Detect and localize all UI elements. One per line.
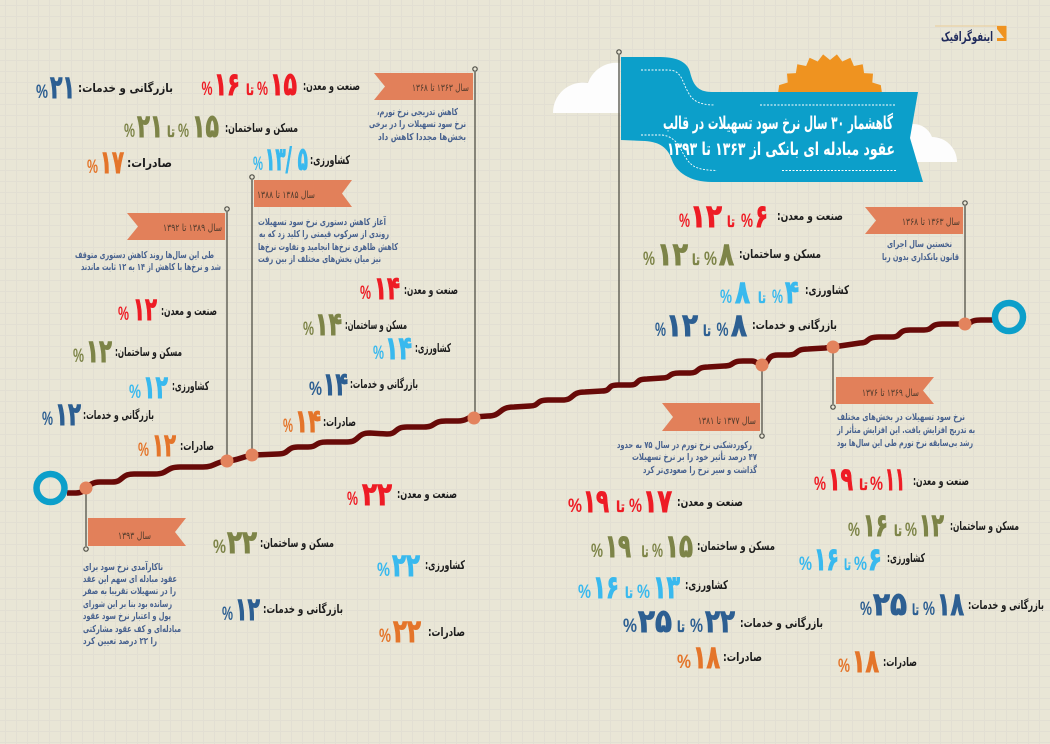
title pole: [617, 50, 621, 384]
note: 1389-1392: [75, 250, 221, 273]
stat: 1393 trade: ۱۲: [235, 590, 260, 628]
stat: 1369-76 agriculture: ۱۶: [814, 540, 839, 578]
stat: 1393 agriculture: کشاورزی:: [425, 558, 465, 573]
stat: 1363-68 exports: %: [87, 157, 98, 178]
stat: 1369-76 exports: ۱۸: [852, 642, 879, 680]
stat: 1363-68 right trade: %: [716, 320, 729, 341]
stat: 1363-68 right trade: بازرگانی و خدمات:: [752, 318, 837, 333]
stat: 1363-68 right trade: %: [655, 320, 666, 341]
stat: 1363-68 right agriculture: ۸: [735, 273, 750, 311]
stat: 1385-88 exports: ۱۴: [295, 402, 321, 440]
flag: 1363-1368 right: سال ۱۳۶۳ تا ۱۳۶۸: [902, 217, 960, 228]
stat: 1393 industry: صنعت و معدن:: [397, 487, 457, 502]
note: 1393: عقود مبادله ای سهم این عقد: [83, 574, 177, 585]
stat: 1369-76 agriculture: کشاورزی:: [887, 551, 925, 566]
stat: 1385-88 trade: بازرگانی و خدمات:: [350, 377, 418, 392]
logo: infographic: اینفوگرافیک: [941, 29, 993, 45]
stat: 1369-76 trade: %: [860, 599, 872, 620]
note: 1385-1388: کاهش ظاهری نرخ‌ها انجامید و تفاوت نرخ‌ها: [258, 242, 398, 253]
stat: 1369-76 industry: [814, 460, 969, 498]
stat: 1389-92 agriculture: ۱۲: [143, 368, 168, 406]
flag: 1385-1388: [254, 180, 352, 207]
stat: 1363-68 right trade: ۱۲: [666, 306, 698, 344]
stat: 1369-76 exports: %: [838, 656, 850, 677]
stat: 1363-68 agriculture: %: [253, 154, 263, 175]
title text: [663, 112, 895, 160]
note: 1393: را ۲۲ درصد تعیین کرد: [83, 636, 157, 647]
flag: 1363-1368 left: [374, 73, 473, 100]
note: 1369-1376: نرخ سود تسهیلات در بخش‌های مختلف: [837, 412, 965, 423]
stat: 1385-88 agriculture: %: [373, 343, 384, 364]
stat: 1363-68 housing: %: [124, 121, 135, 142]
stat: 1369-76 industry: %: [870, 474, 883, 495]
timeline start ring: [36, 474, 64, 502]
stat: 1363-68 right trade: تا: [703, 322, 711, 340]
stat: 1377-81 industry: صنعت و معدن:: [677, 495, 743, 510]
stat: 1389-92 industry: %: [118, 304, 129, 325]
note: 1377-1381: ۴۷ درصد تأثیر خود را بر نرخ تسهیلات: [632, 450, 757, 463]
stat: 1377-81 agriculture: تا: [625, 584, 633, 602]
stat: 1393 agriculture: [377, 546, 465, 584]
stat: 1389-92 exports: %: [138, 440, 149, 461]
stat: 1389-92 housing: [73, 332, 182, 370]
stat: 1363-68 trade: %: [36, 82, 48, 103]
stat: 1389-92 industry: صنعت و معدن:: [161, 304, 217, 319]
sun: [777, 54, 883, 100]
timeline dots: [80, 318, 972, 494]
stat: 1385-88 agriculture: ۱۴: [385, 329, 412, 367]
stat: 1377-81 agriculture: %: [578, 582, 591, 603]
note: 1385-1388: روندی از سرکوب قیمتی را کلید زد که به: [259, 229, 389, 240]
stat: 1385-88 housing: %: [303, 319, 314, 340]
note: 1363-1368 left: کاهش تدریجی نرخ تورم،: [377, 107, 458, 118]
stat: 1363-68 housing: مسکن و ساختمان:: [225, 121, 298, 136]
stat: 1393 housing: %: [213, 537, 226, 558]
stat: 1385-88 trade: %: [309, 379, 322, 400]
stat: 1377-81 industry: %: [568, 496, 582, 517]
stat: 1377-81 agriculture: ۱۶: [593, 568, 619, 606]
stat: 1393 housing: [213, 523, 334, 561]
stat: 1377-81 agriculture: کشاورزی:: [685, 578, 728, 593]
stat: 1385-88 housing: ۱۴: [315, 305, 342, 343]
stat: 1363-68 right industry: ۱۲: [690, 197, 722, 235]
stat: 1363-68 right industry: %: [741, 211, 753, 232]
stat: 1385-88 trade: [309, 365, 418, 403]
stat: 1369-76 trade: تا: [912, 601, 919, 619]
stat: 1363-68 exports: صادرات:: [127, 156, 172, 170]
stat: 1377-81 exports: صادرات:: [723, 650, 762, 664]
stat: 1389-92 agriculture: کشاورزی:: [172, 379, 209, 394]
stat: 1363-68 right agriculture: تا: [758, 289, 766, 307]
stat: 1363-68 trade: بازرگانی و خدمات:: [78, 81, 173, 96]
stat: 1385-88 industry: ۱۴: [374, 269, 400, 307]
stat: 1377-81 exports: [677, 638, 762, 676]
stat: 1377-81 agriculture: ۱۳: [653, 568, 680, 606]
stat: 1385-88 trade: ۱۴: [323, 365, 348, 403]
stat: 1393 exports: %: [379, 626, 391, 647]
stat: 1363-68 industry: ۱۵: [270, 65, 297, 103]
stat: 1385-88 industry: %: [360, 283, 371, 304]
stat: 1369-76 agriculture: %: [854, 554, 867, 575]
note: 1393: را در تسهیلات تقریبا به صفر: [82, 586, 176, 597]
stat: 1369-76 exports: [838, 642, 917, 680]
stat: 1363-68 industry: صنعت و معدن:: [303, 79, 360, 94]
note: 1377-1381: گذاشت و سیر نرخ را صعودی‌تر کرد: [643, 464, 757, 476]
note: 1363-1368 left: نرخ سود تسهیلات را در برخی: [369, 119, 466, 130]
note: 1369-1376: [836, 412, 975, 449]
stat: 1389-92 exports: ۱۲: [152, 426, 176, 464]
stat: 1393 industry: %: [347, 489, 358, 510]
note: 1385-1388: [258, 215, 398, 265]
timeline end ring: [995, 303, 1023, 331]
cloud: left: [553, 63, 620, 113]
stat: 1385-88 exports: [283, 402, 356, 440]
stat: 1363-68 agriculture: کشاورزی:: [310, 153, 350, 168]
stat: 1393 agriculture: %: [377, 560, 390, 581]
stat: 1369-76 industry: تا: [859, 476, 868, 494]
stat: 1369-76 trade: [860, 585, 1044, 623]
stat: 1363-68 right housing: مسکن و ساختمان:: [739, 247, 821, 262]
stat: 1369-76 agriculture: ۶: [868, 540, 882, 578]
stat: 1393 exports: [379, 612, 465, 650]
stat: 1377-81 trade: بازرگانی و خدمات:: [740, 616, 823, 631]
stat: 1369-76 industry: %: [814, 474, 826, 495]
stat: 1363-68 exports: [87, 143, 172, 181]
flag: 1363-1368 left: سال ۱۳۶۳ تا ۱۳۶۸: [412, 83, 469, 94]
stat: 1377-81 housing: %: [591, 541, 603, 562]
stat: 1377-81 trade: تا: [677, 618, 685, 636]
stat: 1377-81 exports: %: [677, 652, 691, 673]
stat: 1377-81 housing: [591, 527, 775, 565]
stat: 1369-76 industry: صنعت و معدن:: [913, 474, 969, 489]
stat: 1393 industry: ۲۲: [362, 475, 392, 513]
flag: 1363-1368 right: [865, 207, 963, 234]
stat: 1363-68 housing: [124, 107, 298, 145]
stat: 1363-68 right industry: %: [679, 211, 690, 232]
stat: 1377-81 industry: ۱۹: [583, 482, 609, 520]
stat: 1363-68 right housing: ۸: [719, 235, 734, 273]
note: 1393: مبادله‌ای و کف عقود مشارکتی: [83, 624, 181, 635]
note: 1363-1368 right: قانون بانکداری بدون ربا: [882, 252, 959, 263]
stat: 1363-68 exports: ۱۷: [100, 143, 124, 181]
note: 1393: [82, 560, 181, 647]
stat: 1377-81 trade: ۲۲: [705, 602, 735, 640]
note: 1377-1381: [617, 440, 757, 476]
stat: 1363-68 housing: ۲۱: [137, 107, 163, 145]
flag: 1389-1392: [127, 213, 225, 240]
stat: 1369-76 trade: ۱۸: [937, 585, 964, 623]
stat: 1369-76 housing: تا: [894, 522, 902, 540]
stat: 1363-68 trade: [36, 68, 173, 106]
note: 1393: ناکارآمدی نرخ سود برای: [83, 560, 163, 573]
stat: 1377-81 trade: [623, 602, 823, 640]
stat: 1363-68 industry: ۱۶: [214, 65, 240, 103]
stat: 1363-68 agriculture: ۱۳/ ۵: [265, 140, 308, 178]
note: 1369-1376: به تدریج افزایش یافت. این افزایش متأثر از: [836, 423, 975, 436]
note: 1363-1368 right: نخستین سال اجرای: [887, 239, 952, 250]
stat: 1385-88 industry: صنعت و معدن:: [404, 283, 458, 298]
stat: 1385-88 agriculture: [373, 329, 451, 367]
stat: 1389-92 housing: %: [73, 346, 84, 367]
stat: 1369-76 agriculture: %: [799, 554, 812, 575]
stat: 1377-81 housing: مسکن و ساختمان:: [697, 539, 775, 554]
poles: [84, 67, 967, 551]
stat: 1363-68 industry: %: [202, 79, 213, 100]
stat: 1389-92 trade: %: [42, 409, 53, 430]
stat: 1363-68 right agriculture: ۴: [785, 273, 799, 311]
stat: 1363-68 right agriculture: [720, 273, 849, 311]
stat: 1363-68 housing: %: [178, 121, 189, 142]
stat: 1389-92 industry: ۱۲: [133, 290, 157, 328]
flag: 1393: [88, 518, 186, 546]
stat: 1369-76 industry: ۱۱: [885, 460, 905, 498]
stat: 1389-92 trade: بازرگانی و خدمات:: [83, 408, 154, 423]
stat: 1389-92 housing: ۱۲: [86, 332, 112, 370]
stat: 1377-81 industry: تا: [616, 498, 625, 516]
stat: 1363-68 industry: %: [257, 79, 268, 100]
note: 1363-1368 left: بخش‌ها مجددا کاهش داد: [378, 132, 466, 143]
note: 1393: رسانده بود بنا بر این شورای: [83, 599, 172, 610]
stat: 1393 industry: [347, 475, 457, 513]
stat: 1363-68 industry: تا: [246, 81, 254, 99]
note: 1369-1376: رشد بی‌سابقه نرخ تورم طی این سال‌ها بود: [837, 438, 973, 449]
stat: 1389-92 trade: ۱۲: [55, 395, 81, 433]
stat: 1363-68 right industry: صنعت و معدن:: [777, 209, 843, 224]
cloud: right: [905, 124, 957, 162]
stat: 1369-76 industry: ۱۹: [828, 460, 853, 498]
flag: 1377-1381: سال ۱۳۷۷ تا ۱۳۸۱: [698, 416, 756, 427]
stat: 1389-92 agriculture: %: [129, 382, 141, 403]
stat: 1389-92 industry: [118, 290, 217, 328]
stat: 1377-81 housing: ۱۵: [665, 527, 693, 565]
note: 1393: پول و اعتبار نرخ سود عقود: [83, 611, 171, 622]
stat: 1363-68 trade: ۲۱: [50, 68, 75, 106]
flag: 1385-1388: سال ۱۳۸۵ تا ۱۳۸۸: [257, 190, 315, 201]
stat: 1369-76 agriculture: [799, 540, 925, 578]
note: 1389-1392: طی این سال‌ها روند کاهش دستوری متوقف: [75, 250, 214, 261]
title text: عقود مبادله ای بانکی از ۱۳۶۳ تا ۱۳۹۳: [667, 139, 895, 160]
stat: 1393 trade: %: [222, 604, 233, 625]
stat: 1393 agriculture: ۲۲: [392, 546, 420, 584]
stat: 1377-81 industry: [568, 482, 743, 520]
stat: 1385-88 exports: صادرات:: [323, 415, 356, 429]
logo: infographic: [935, 26, 1006, 45]
stat: 1389-92 exports: صادرات:: [180, 439, 214, 453]
stat: 1363-68 housing: تا: [167, 123, 175, 141]
stat: 1369-76 housing: [848, 506, 1019, 544]
stat: 1393 trade: بازرگانی و خدمات:: [263, 602, 343, 617]
stat: 1393 housing: مسکن و ساختمان:: [260, 536, 334, 551]
stat: 1377-81 housing: تا: [642, 543, 648, 561]
stat: 1363-68 right trade: ۸: [731, 306, 747, 344]
stat: 1363-68 right industry: تا: [727, 213, 735, 231]
stat: 1363-68 right housing: ۱۲: [657, 235, 688, 273]
note: 1385-1388: آغاز کاهش دستوری نرخ سود تسهیلات: [258, 215, 387, 228]
stat: 1385-88 agriculture: کشاورزی:: [415, 341, 451, 356]
stat: 1385-88 housing: مسکن و ساختمان:: [345, 318, 407, 333]
stat: 1393 housing: ۲۲: [227, 523, 257, 561]
stat: 1377-81 trade: ۲۵: [638, 602, 672, 640]
stat: 1377-81 housing: ۱۹: [605, 527, 631, 565]
note: 1363-1368 left: [369, 107, 466, 143]
title banner: [621, 57, 923, 182]
stat: 1369-76 trade: ۲۵: [873, 585, 907, 623]
stat: 1393 exports: صادرات:: [428, 625, 465, 639]
note: 1363-1368 right: [882, 239, 959, 263]
flag: 1369-1376: [836, 377, 934, 404]
stat: 1377-81 exports: ۱۸: [693, 638, 720, 676]
stat: 1385-88 housing: [303, 305, 407, 343]
stat: 1369-76 housing: ۱۶: [863, 506, 888, 544]
stat: 1385-88 industry: [360, 269, 458, 307]
stat: 1385-88 exports: %: [283, 416, 293, 437]
flag: 1389-1392: سال ۱۳۸۹ تا ۱۳۹۲: [163, 223, 222, 234]
stat: 1369-76 housing: %: [905, 520, 917, 541]
stat: 1363-68 industry: [202, 65, 360, 103]
stat: 1363-68 right housing: [643, 235, 821, 273]
stat: 1377-81 industry: %: [629, 496, 642, 517]
stat: 1393 exports: ۲۲: [393, 612, 421, 650]
stat: 1369-76 agriculture: تا: [844, 556, 851, 574]
stat: 1389-92 exports: [138, 426, 214, 464]
stat: 1369-76 housing: %: [848, 520, 860, 541]
timeline curve: [67, 320, 995, 493]
stat: 1377-81 industry: ۱۷: [643, 482, 672, 520]
stat: 1389-92 housing: مسکن و ساختمان:: [115, 345, 182, 360]
title text: گاهشمار ۳۰ سال نرخ سود تسهیلات در قالب: [663, 112, 893, 134]
stat: 1389-92 trade: [42, 395, 154, 433]
flag: 1393: سال ۱۳۹۳: [118, 531, 151, 542]
note: 1385-1388: نیز میان بخش‌های مختلف از بین رفت: [258, 254, 381, 265]
stat: 1369-76 trade: %: [923, 599, 935, 620]
flag: 1369-1376: سال ۱۳۶۹ تا ۱۳۷۶: [862, 388, 919, 399]
note: 1389-1392: شد و نرخ‌ها با کاهش از ۱۴ به ۱۲ ثابت ماندند: [81, 262, 221, 273]
stat: 1393 trade: [222, 590, 343, 628]
stat: 1389-92 agriculture: [129, 368, 209, 406]
stat: 1363-68 right trade: [655, 306, 837, 344]
stat: 1377-81 housing: %: [652, 541, 663, 562]
stat: 1363-68 right housing: تا: [692, 251, 700, 269]
stat: 1377-81 trade: %: [623, 616, 637, 637]
stat: 1363-68 right housing: %: [643, 249, 655, 270]
stat: 1363-68 right agriculture: کشاورزی:: [805, 283, 849, 298]
stat: 1363-68 right industry: [679, 197, 843, 235]
stat: 1363-68 right agriculture: %: [720, 287, 732, 308]
stat: 1369-76 exports: صادرات:: [883, 655, 917, 669]
stat: 1363-68 right agriculture: %: [772, 287, 783, 308]
stat: 1369-76 housing: ۱۲: [919, 506, 944, 544]
flag: 1377-1381: [662, 403, 760, 431]
note: 1377-1381: رکوردشکنی نرخ تورم در سال ۷۵ به حدود: [617, 440, 752, 451]
stat: 1363-68 housing: ۱۵: [192, 107, 219, 145]
stat: 1377-81 agriculture: %: [637, 582, 650, 603]
stat: 1363-68 right housing: %: [704, 249, 717, 270]
stat: 1363-68 right industry: ۶: [755, 197, 768, 235]
stat: 1377-81 agriculture: [578, 568, 728, 606]
stat: 1377-81 trade: %: [690, 616, 703, 637]
